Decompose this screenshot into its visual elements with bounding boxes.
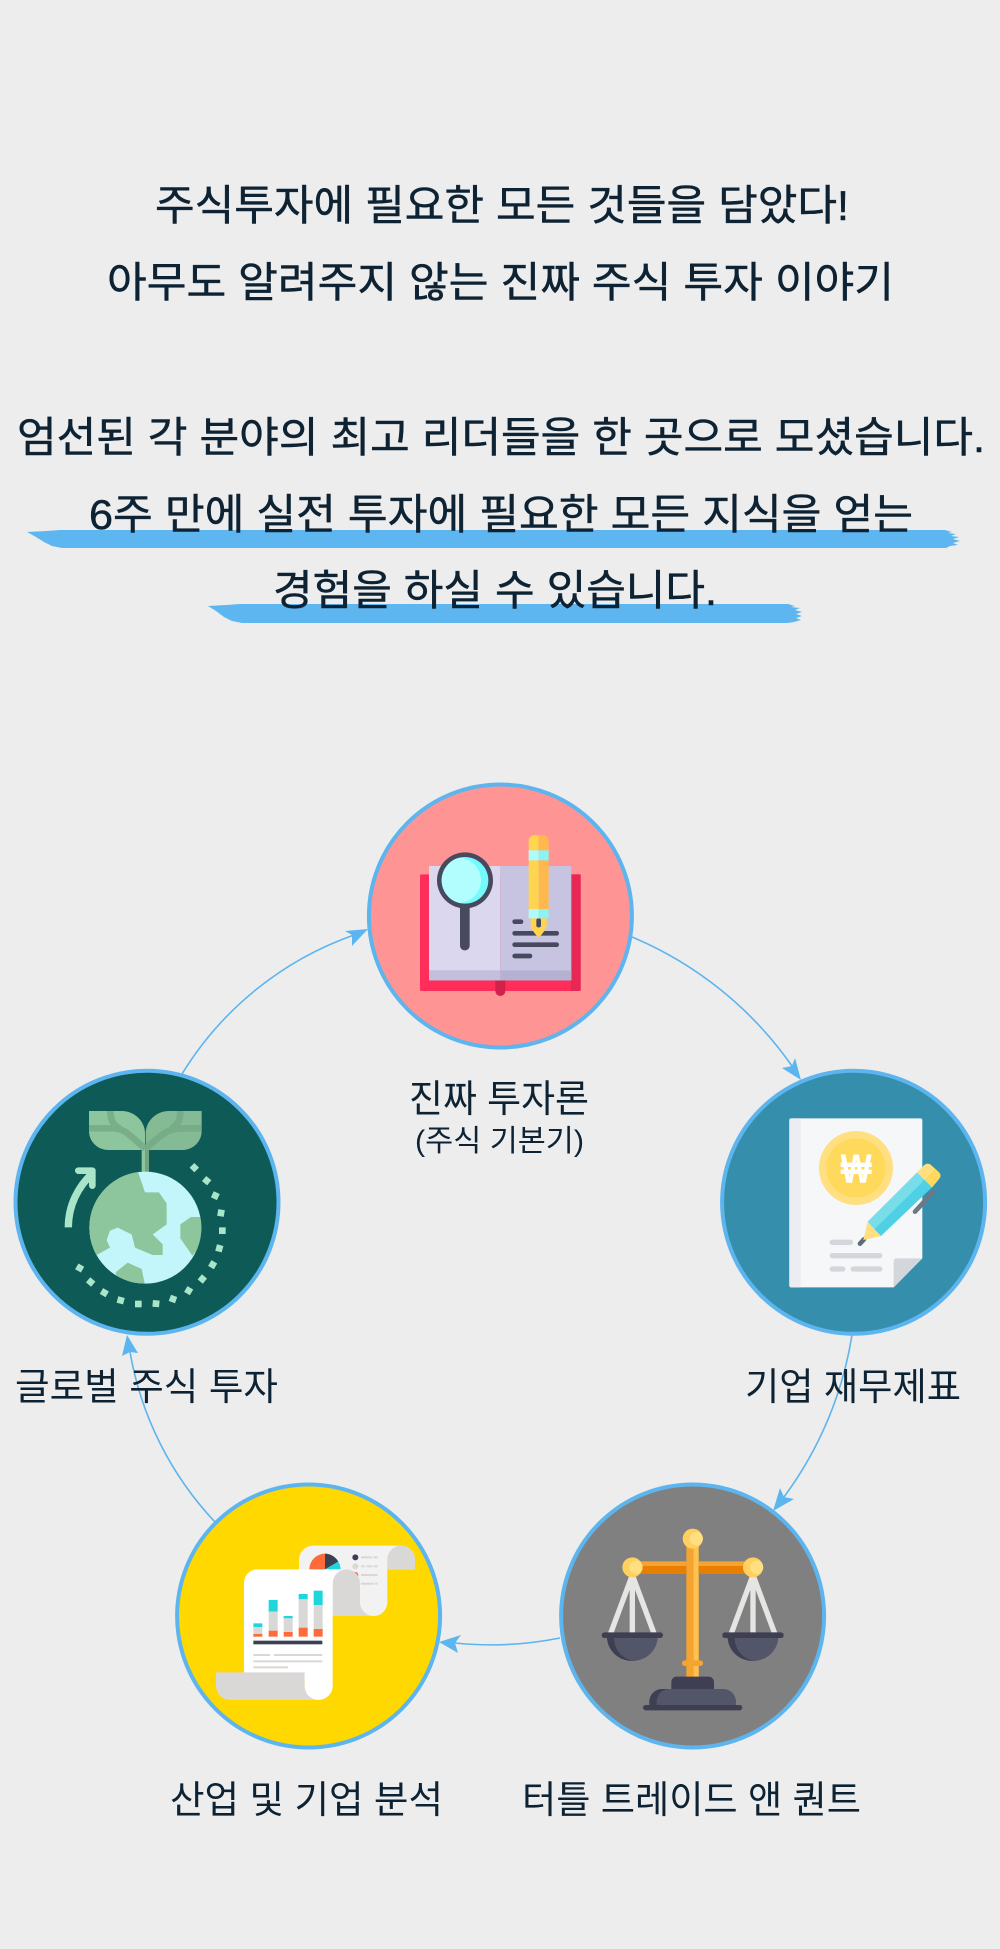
icon: book with magnifier and pencil (420, 835, 581, 996)
icon: report scrolls with charts (216, 1546, 415, 1700)
label: industry analysis: 산업 및 기업 분석 (170, 1780, 443, 1822)
arrow: fundamentals to financial statements (632, 937, 801, 1080)
label: fundamentals (409, 1079, 589, 1158)
label main: 진짜 투자론 (409, 1079, 589, 1121)
arrow: industry analysis to global (122, 1335, 215, 1522)
icon: document with won coin and pen (789, 1118, 940, 1287)
label sub: (주식 기본기) (415, 1125, 584, 1158)
highlight stroke: line 4 (27, 530, 960, 548)
description line 2: 6주 만에 실전 투자에 필요한 모든 지식을 얻는 (89, 491, 913, 538)
highlight stroke: line 5 (208, 604, 802, 623)
icon: globe with sprout (68, 1111, 226, 1307)
heading line 2: 아무도 알려주지 않는 진짜 주식 투자 이야기 (107, 259, 894, 306)
description line 3: 경험을 하실 수 있습니다. (273, 567, 717, 614)
arrow: global to fundamentals (182, 929, 368, 1074)
circle: turtle trade and quant (561, 1484, 824, 1748)
arrow: financial statements to turtle trade (773, 1335, 852, 1511)
circle: financial statements (722, 1071, 985, 1334)
label: financial statements: 기업 재무제표 (745, 1367, 961, 1409)
description line 1: 엄선된 각 분야의 최고 리더들을 한 곳으로 모셨습니다. (17, 414, 985, 461)
heading line 1: 주식투자에 필요한 모든 것들을 담았다! (155, 182, 849, 229)
icon: document with won coin and pen: ₩ (841, 1146, 872, 1192)
circle: fundamentals (369, 784, 632, 1048)
arrow: turtle trade to industry analysis (439, 1635, 560, 1653)
icon: balance scale (602, 1529, 784, 1710)
text block: description (17, 414, 985, 614)
label: turtle trade and quant: 터틀 트레이드 앤 퀀트 (522, 1780, 861, 1822)
circle: industry analysis (177, 1484, 440, 1748)
circle: global investing (16, 1071, 278, 1334)
heading: intro (107, 182, 894, 306)
label: global investing: 글로벌 주식 투자 (15, 1367, 278, 1409)
